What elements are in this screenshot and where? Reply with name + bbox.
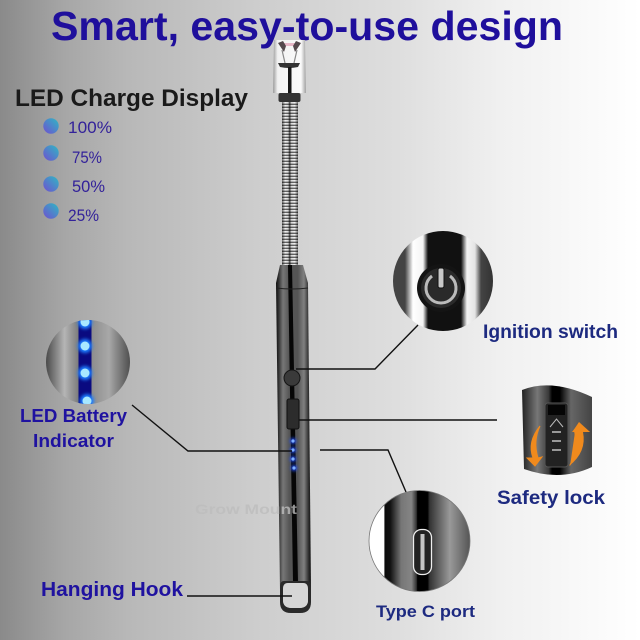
ignition label: Ignition switch — [483, 322, 618, 343]
ignition button — [284, 370, 300, 386]
legend item 50% — [43, 176, 105, 196]
connector: safety lock — [299, 419, 497, 421]
legend item 25% — [43, 203, 99, 225]
legend heading: LED Charge Display — [15, 85, 249, 112]
type C outline — [369, 490, 470, 592]
hanging hook label: Hanging Hook — [41, 579, 184, 601]
LED label: Indicator — [33, 431, 114, 451]
legend item 75%: 75% — [72, 149, 102, 167]
legend item 25%: 25% — [68, 207, 99, 225]
safety lock callout — [497, 385, 605, 509]
safety lock slider — [287, 399, 299, 429]
legend: LED charge display — [15, 85, 249, 225]
body collar ring — [276, 288, 308, 289]
ignition detail circle — [393, 231, 493, 331]
hanging hook loop — [280, 581, 311, 613]
safety lock label: Safety lock — [497, 488, 605, 509]
hook opening — [283, 583, 308, 608]
product: arc lighter — [273, 40, 311, 613]
type C label: Type C port — [376, 602, 475, 621]
ignition switch callout — [393, 231, 618, 343]
lighter head — [273, 40, 306, 102]
lock detail image — [522, 385, 592, 475]
legend item 100%: 100% — [68, 119, 112, 137]
type C callout — [369, 490, 475, 621]
flexible neck — [282, 102, 298, 267]
title: Smart, easy-to-use design — [51, 3, 563, 49]
LED detail circle — [46, 315, 130, 408]
connector: type C — [320, 450, 406, 492]
type C detail circle — [369, 490, 470, 592]
legend item 75% — [43, 145, 102, 167]
connector: ignition — [296, 325, 418, 369]
legend item 50%: 50% — [72, 178, 105, 196]
watermark: Grow Mount — [195, 501, 297, 517]
lighter body — [276, 265, 311, 590]
legend item 100% — [43, 118, 112, 137]
arrow: up — [570, 423, 590, 466]
LED battery callout — [20, 315, 130, 451]
connector: LED indicator — [132, 405, 292, 451]
arrow: down — [527, 426, 542, 466]
body centre stripe — [288, 265, 298, 583]
LED lights — [290, 438, 297, 471]
connector: hook — [187, 595, 292, 597]
LED label: LED Battery — [20, 406, 127, 426]
